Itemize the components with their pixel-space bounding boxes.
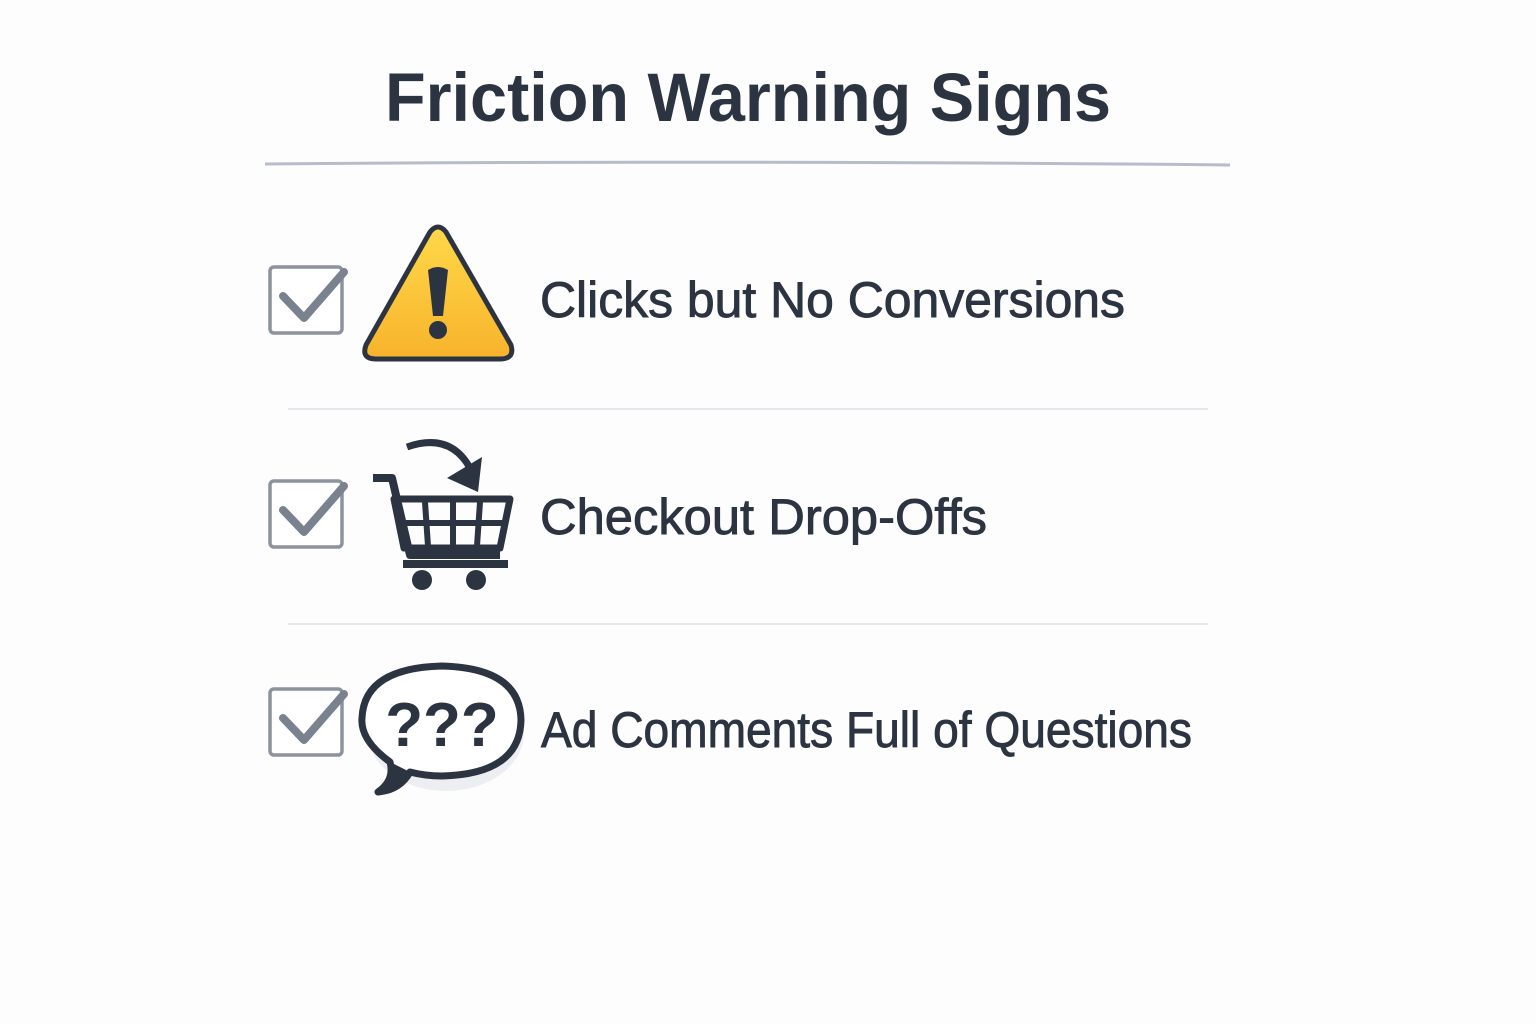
row 1: clicks but no conversions [270, 227, 1125, 359]
icon: speech bubble with question marks [362, 666, 524, 792]
icon: shopping cart with arrow [373, 443, 510, 590]
icon: warning triangle [365, 227, 512, 359]
checkbox 1 [270, 267, 344, 333]
checkbox 3 [270, 689, 344, 755]
label 2: Checkout Drop-Offs [540, 489, 987, 545]
row 3: ad comments full of questions [270, 666, 1192, 792]
label 1: Clicks but No Conversions [540, 272, 1125, 328]
title: Friction Warning Signs [385, 59, 1111, 136]
label 3: Ad Comments Full of Questions [541, 702, 1192, 758]
checkbox 2 [270, 481, 344, 547]
icon: speech bubble with question marks: ??? [385, 691, 499, 760]
row 2: checkout drop-offs [270, 443, 987, 590]
